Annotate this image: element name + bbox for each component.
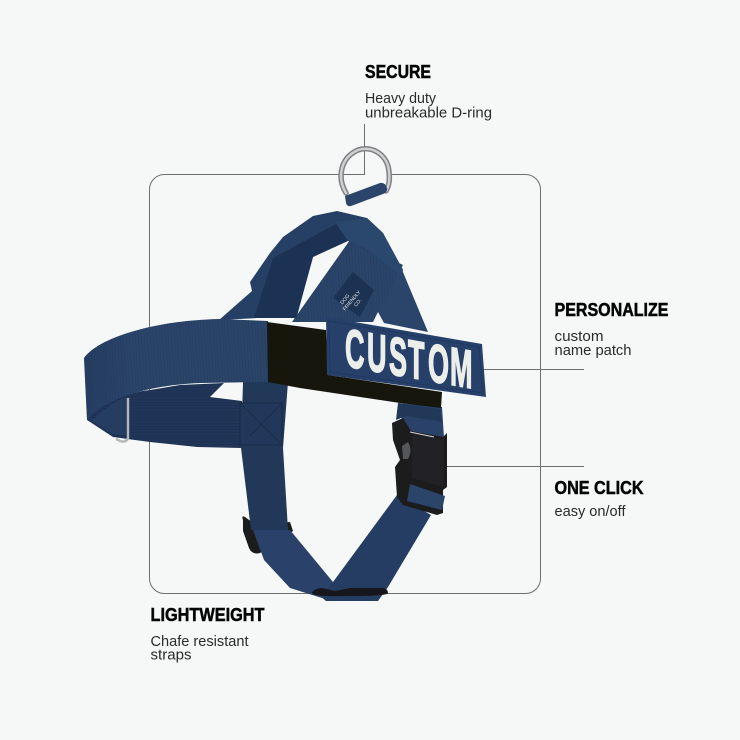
callout: secure: [365, 62, 492, 122]
D-ring: [341, 149, 389, 206]
stitched gusset: [240, 403, 282, 445]
inner shoulder strap: [254, 223, 348, 318]
description: [365, 91, 492, 122]
chest panel: [292, 240, 403, 322]
rear buckle wire: [116, 398, 128, 442]
patch text: CUSTOM: [345, 318, 472, 401]
icon: harness: [84, 149, 486, 601]
description: [554, 329, 632, 359]
callout line: personalize: [482, 368, 584, 370]
heading: PERSONALIZE: [554, 300, 668, 320]
woven brand label: [333, 272, 374, 317]
description: Chafe resistant: [150, 634, 248, 650]
custom name patch: [326, 317, 486, 401]
callout: personalize: [554, 300, 668, 359]
vertical strap: [241, 382, 288, 530]
buckle: [392, 418, 447, 515]
description: custom: [554, 329, 604, 345]
woven brand label: DOG: [339, 293, 351, 306]
outer shoulder strap: [219, 211, 403, 320]
bottom slide: [312, 588, 388, 596]
lower right strap: [320, 495, 431, 601]
heading: SECURE: [365, 62, 431, 82]
description: [150, 634, 248, 664]
callout: one click: [554, 478, 644, 520]
lower left strap: [253, 530, 333, 598]
woven brand label: CO.: [353, 298, 363, 308]
strip below velcro toward buckle: [396, 403, 442, 422]
right shoulder strap to patch: [370, 265, 428, 332]
top strap into buckle: [398, 403, 444, 438]
heading: ONE CLICK: [554, 478, 644, 498]
callout: lightweight: [150, 605, 265, 664]
description: Heavy duty: [365, 91, 437, 107]
description: name patch: [554, 343, 632, 359]
left side slide: [242, 516, 293, 553]
description: straps: [150, 648, 192, 664]
yoke fold: [335, 218, 403, 276]
woven brand label: FRIENDLY: [342, 289, 363, 312]
callout line: secure: [364, 124, 366, 175]
lower inner strap: [87, 383, 242, 448]
callout line: one click: [446, 466, 584, 468]
description: easy on/off: [554, 504, 626, 520]
feature frame: [150, 174, 540, 594]
main waist band: [84, 319, 268, 420]
velcro strip: [267, 322, 442, 408]
inner loop lining: [92, 396, 129, 436]
description: unbreakable D-ring: [365, 106, 492, 122]
heading: LIGHTWEIGHT: [150, 605, 265, 625]
